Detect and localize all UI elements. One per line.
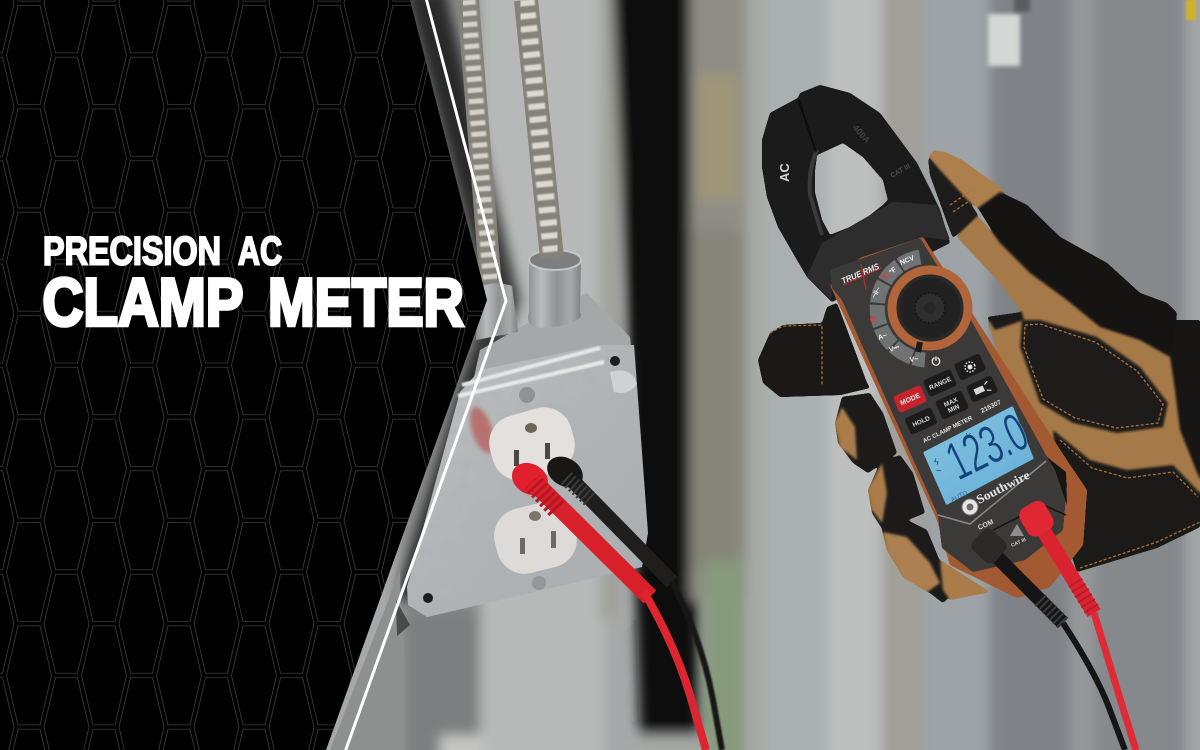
electrical box <box>407 250 648 617</box>
jaw inner rim <box>810 150 822 235</box>
upper outlet <box>483 401 581 487</box>
com port label: COM <box>977 519 995 532</box>
red reflection on box <box>465 404 499 456</box>
lcd reading: 123.0 <box>937 402 1037 492</box>
hole left <box>423 593 433 603</box>
max min button <box>935 390 969 420</box>
black knit back of glove <box>978 192 1177 357</box>
backlight button <box>954 353 986 381</box>
metal bracket at lower left <box>330 570 410 750</box>
bright top lip <box>458 348 604 396</box>
lcd volt label: V <box>966 433 971 440</box>
hold button <box>904 407 938 435</box>
title line two: CLAMP <box>42 264 244 340</box>
display bezel <box>938 461 1046 524</box>
dial labels: NCV <box>899 255 916 267</box>
category label: CAT III <box>1010 537 1027 549</box>
mode button: MODE <box>899 392 922 407</box>
glove and hand <box>758 150 1200 603</box>
black title panel with hexagon pattern <box>0 0 487 750</box>
blurred yellow tag <box>1186 0 1196 20</box>
finger two <box>868 455 925 530</box>
title <box>42 230 464 340</box>
black probe in meter <box>968 526 1125 750</box>
orange meter body <box>830 237 1087 598</box>
dial labels: °C °F <box>880 265 899 283</box>
box corner tab <box>610 370 637 393</box>
warning triangle <box>1010 524 1024 536</box>
max min button: MIN <box>947 403 961 415</box>
blurred dark fixture <box>1014 0 1030 12</box>
white chevron line <box>345 0 506 750</box>
title line one: PRECISION <box>43 230 221 274</box>
lcd screen <box>925 408 1032 503</box>
dark thumb web strip <box>987 312 1024 330</box>
finger one <box>835 393 897 473</box>
jaw gap notch <box>798 98 816 152</box>
hold button: HOLD <box>912 415 932 429</box>
clamp jaw <box>762 85 950 302</box>
southwire wordmark: Southwire <box>974 468 1032 507</box>
left conduit fitting <box>476 283 518 340</box>
screw lower <box>532 576 546 590</box>
hole right <box>610 356 620 366</box>
lcd auto label: AUTO <box>950 490 969 504</box>
flashlight button <box>966 375 998 403</box>
grip pad <box>1020 320 1168 433</box>
function wedge ring <box>877 257 925 360</box>
glove stitching <box>770 190 1200 568</box>
mode button <box>893 385 927 413</box>
right metal conduit <box>526 0 552 258</box>
finger three <box>882 520 990 603</box>
lcd ac symbol: ~ <box>936 466 942 477</box>
range button <box>923 369 957 397</box>
black wrist <box>1170 320 1200 480</box>
dial labels: V⎓ <box>888 344 901 354</box>
model number: 215307 <box>980 399 1003 415</box>
dial knob centre <box>900 278 960 352</box>
southwire logo mark <box>962 499 978 515</box>
title line two: METER <box>268 264 464 340</box>
max min button: MAX <box>943 396 960 409</box>
left metal conduit <box>468 0 492 300</box>
dial labels: V~ <box>909 356 919 364</box>
lcd lightning symbol: ϟ <box>934 457 939 467</box>
true rms logo: TRUE RMS <box>840 261 881 286</box>
AC jaw label: AC <box>777 163 792 182</box>
box top plate <box>470 293 637 400</box>
soft glove shapes <box>758 150 1200 603</box>
port divider line <box>993 505 1066 530</box>
thumb tan tip <box>929 150 1005 210</box>
orange dial ring <box>892 270 968 346</box>
lower finger knob <box>758 303 870 397</box>
lower outlet <box>488 496 583 580</box>
lower palm pad <box>1053 430 1200 572</box>
thumb dark side <box>928 157 978 238</box>
dial labels: ⊣⊢ <box>870 285 883 300</box>
dial labels: Ω <box>870 316 877 322</box>
shadow beside the black panel <box>395 0 520 600</box>
dial labels: A~ <box>877 332 888 342</box>
title line one: AC <box>238 230 282 274</box>
box face <box>407 345 648 617</box>
jaw category label: CAT III <box>890 163 912 180</box>
clamp meter <box>762 85 1087 598</box>
power symbol: ⏻ <box>932 355 941 368</box>
jaw rating label: 400A <box>851 123 873 146</box>
blurred white block <box>988 14 1020 66</box>
red probe in meter <box>1016 498 1136 750</box>
red test lead in outlet <box>506 457 706 750</box>
title line two <box>42 264 464 340</box>
black test lead in outlet <box>542 450 722 750</box>
meter head <box>807 202 950 300</box>
screw upper <box>519 387 535 403</box>
dial labels <box>870 255 919 364</box>
right conduit fitting <box>528 250 581 328</box>
tan palm <box>957 216 1200 515</box>
galvanized mottling <box>407 345 648 617</box>
model label: AC CLAMP METER <box>922 415 974 445</box>
grey meter face <box>830 238 1067 572</box>
black lower wedge <box>1047 457 1067 505</box>
range button: RANGE <box>928 376 953 392</box>
